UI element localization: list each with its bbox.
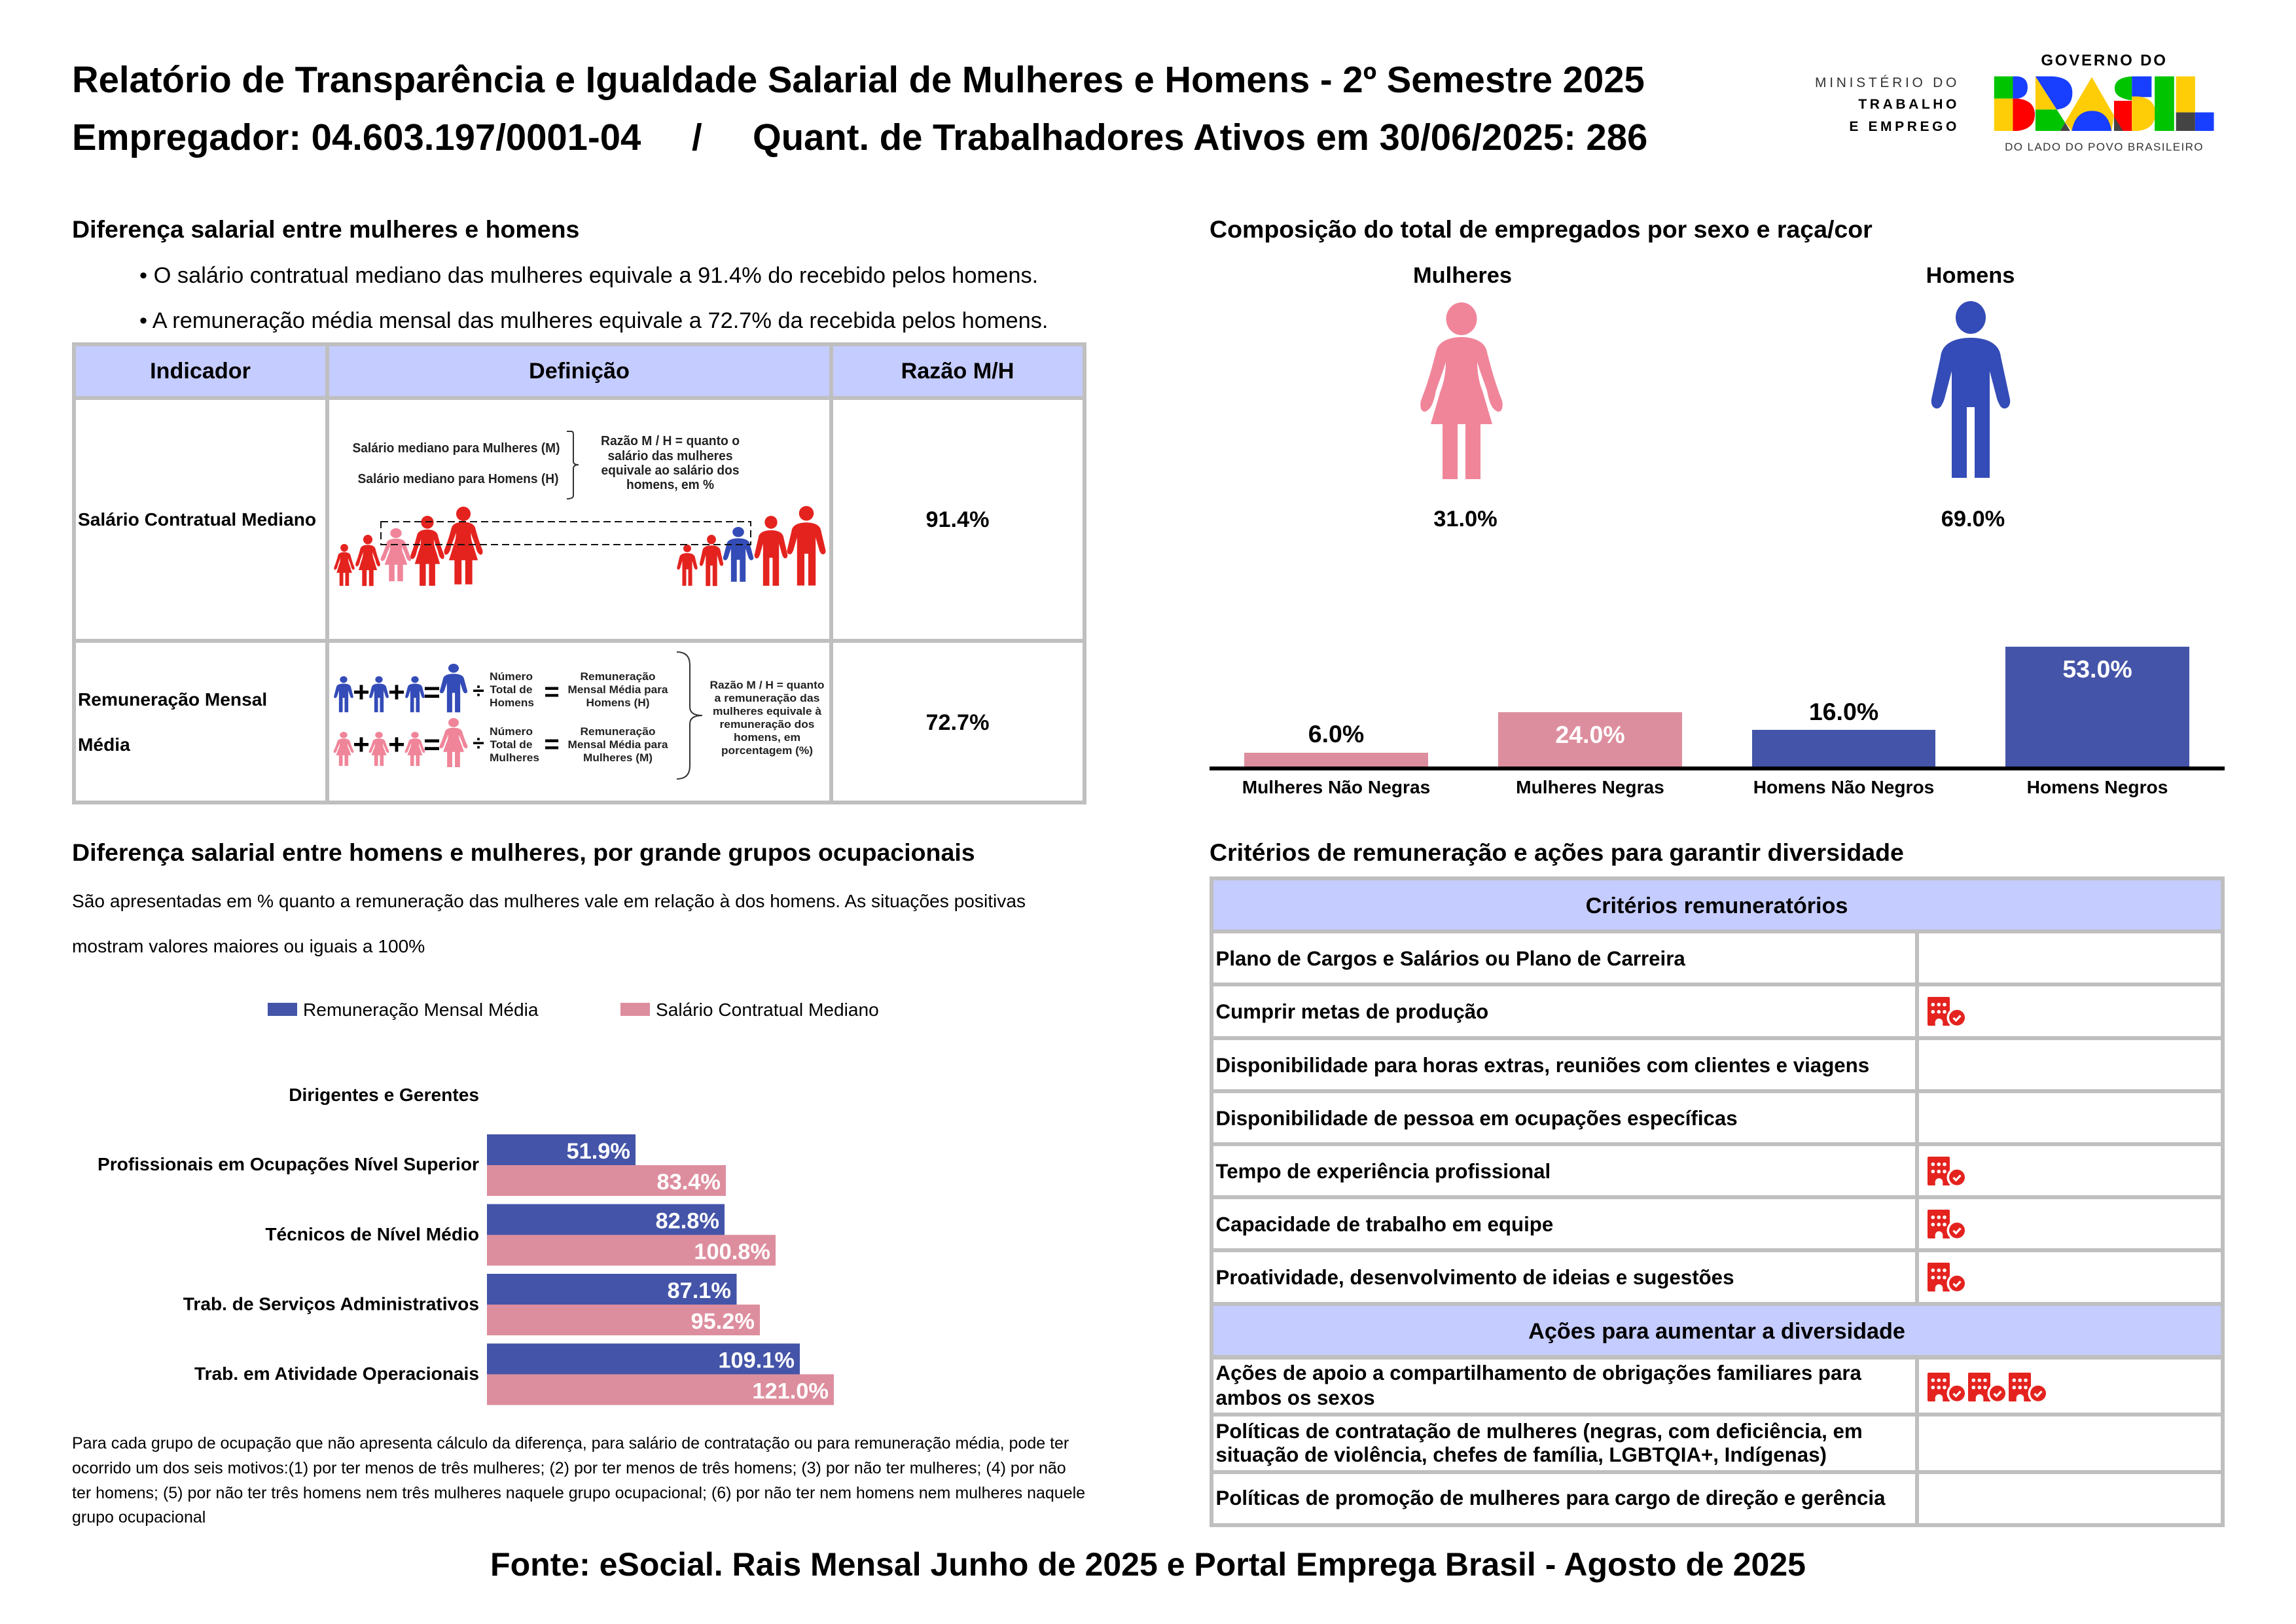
heading: grupos ocupacionais: Diferença salarial entre homens e mulheres, por grande grupos ocupacionais — [72, 839, 975, 866]
diagram: remuneração média: Total de — [490, 738, 533, 751]
icon: empresa tempo de experiência — [1928, 1157, 1967, 1187]
diagram: remuneração média: + — [353, 729, 370, 761]
diagram: remuneração média: Total de — [490, 683, 533, 696]
logo: ministério e governo do Brasil: DO LADO DO POVO BRASILEIRO — [2005, 141, 2204, 153]
table: critérios e ações: Capacidade de trabalho em equipe — [1216, 1213, 1553, 1236]
bar chart: grupos ocupacionais: 51.9% — [566, 1139, 630, 1164]
icon: woman figure — [1420, 302, 1503, 479]
diagram: remuneração média: = — [423, 676, 440, 708]
diagram: remuneração média: + — [388, 676, 405, 708]
diagram: salário mediano: Salário mediano para Mulheres (M) — [352, 441, 560, 456]
text block: bullets: • A remuneração média mensal das mulheres equivale a 72.7% da recebida pelos homens. — [139, 308, 1049, 333]
panel: diferença salarial — [72, 215, 1086, 804]
table: indicadores: Definição — [529, 359, 630, 384]
diagram: remuneração média — [334, 652, 825, 779]
bar chart: sexo e raça: 6.0% — [1308, 720, 1364, 748]
table: critérios e ações: situação de violência, chefes de família, LGBTQIA+, Indígenas) — [1216, 1443, 1827, 1466]
bar chart: grupos ocupacionais — [98, 1085, 834, 1405]
table: indicadores: Média — [78, 734, 130, 755]
diagram: remuneração média: Homens (H) — [586, 696, 649, 709]
bar chart: sexo e raça: Homens Negros — [2027, 777, 2168, 797]
bar chart: grupos ocupacionais: 82.8% — [655, 1208, 719, 1233]
bar chart: sexo e raça: Homens Não Negros — [1753, 777, 1934, 797]
diagram: remuneração média: = — [544, 730, 560, 759]
diagram: remuneração média: Número — [490, 670, 533, 683]
bar chart: grupos ocupacionais: Trab. de Serviços Administrativos — [183, 1293, 479, 1314]
text block: nota: ter homens; (5) por não ter três homens nem três mulheres naquele grupo ocupacional; (6) por não ter nem homens nem mulheres naquele — [72, 1484, 1085, 1502]
diagram: remuneração média: Remuneração — [580, 725, 656, 738]
diagram: remuneração média: a remuneração das — [715, 692, 819, 704]
diagram: remuneração média: ÷ — [473, 679, 484, 702]
table: indicadores: Remuneração Mensal — [78, 689, 267, 710]
diagram: salário mediano: equivale ao salário dos — [601, 463, 740, 478]
table: critérios e ações: Ações de apoio a compartilhamento de obrigações familiares para — [1216, 1362, 1862, 1384]
panel: composição — [1210, 215, 2225, 797]
bar chart: grupos ocupacionais: 87.1% — [667, 1278, 731, 1303]
text block: bullets — [139, 263, 1049, 333]
heading: composição: Composição do total de empregados por sexo e raça/cor — [1210, 215, 1873, 243]
table: critérios e ações: Tempo de experiência profissional — [1216, 1160, 1551, 1183]
text block: nota: grupo ocupacional — [72, 1508, 206, 1526]
panel: critérios — [1210, 839, 2225, 1527]
diagram: remuneração média: Mensal Média para — [568, 683, 668, 696]
diagram: remuneração média: Remuneração — [580, 670, 656, 683]
diagram: remuneração média: Mulheres — [490, 751, 539, 764]
bar chart: grupos ocupacionais: Profissionais em Ocupações Nível Superior — [98, 1154, 479, 1174]
icon: empresa proatividade — [1928, 1263, 1967, 1293]
text block: descrição — [72, 891, 1026, 956]
table: indicadores: 91.4% — [926, 507, 989, 532]
table: critérios e ações: Critérios remuneratórios — [1586, 893, 1848, 918]
table: indicadores: Salário Contratual Mediano — [78, 509, 316, 530]
logo: ministério e governo do Brasil — [1815, 52, 2214, 153]
table: indicadores: Razão M/H — [901, 359, 1014, 384]
diagram: remuneração média: Mulheres (M) — [583, 751, 653, 764]
text block: descrição: mostram valores maiores ou iguais a 100% — [72, 936, 425, 956]
bar chart: grupos ocupacionais: 95.2% — [691, 1309, 755, 1334]
legend: Salário Contratual Mediano — [656, 1000, 879, 1020]
table: critérios e ações: ambos os sexos — [1216, 1386, 1375, 1409]
diagram: remuneração média: porcentagem (%) — [721, 744, 813, 757]
panel: grupos ocupacionais — [72, 839, 1085, 1526]
bar chart: sexo e raça: Mulheres Não Negras — [1242, 777, 1430, 797]
legend — [268, 1000, 879, 1020]
title: Empregador: 04.603.197/0001-04 — [72, 117, 641, 158]
text block: nota — [72, 1434, 1085, 1526]
bar chart: sexo e raça: Mulheres Negras — [1516, 777, 1664, 797]
table: indicadores: Indicador — [150, 359, 251, 384]
bar chart: grupos ocupacionais: Trab. em Atividade Operacionais — [194, 1363, 479, 1384]
text block: descrição: São apresentadas em % quanto a remuneração das mulheres vale em relação à dos homens. As situações positivas — [72, 891, 1026, 911]
diagram: salário mediano: Salário mediano para Homens (H) — [357, 472, 559, 486]
table: critérios e ações: Disponibilidade de pessoa em ocupações específicas — [1216, 1107, 1738, 1130]
bar chart: sexo e raça: 53.0% — [2062, 655, 2132, 683]
diagram: remuneração média: remuneração dos — [720, 718, 814, 731]
diagram: salário mediano: homens, em % — [626, 478, 714, 492]
diagram: salário mediano — [334, 431, 826, 586]
table: critérios e ações: Ações para aumentar a diversidade — [1528, 1319, 1905, 1344]
bar chart: grupos ocupacionais: 109.1% — [718, 1348, 795, 1373]
bar chart: sexo e raça — [1210, 647, 2225, 797]
diagram: remuneração média: Razão M / H = quanto — [709, 679, 825, 691]
table: indicadores: 72.7% — [926, 710, 989, 735]
value: 31%: 31.0% — [1433, 507, 1498, 532]
footer: fonte: Fonte: eSocial. Rais Mensal Junho de 2025 e Portal Emprega Brasil - Agosto de 2025 — [490, 1546, 1806, 1583]
diagram: salário mediano: salário das mulheres — [607, 449, 733, 463]
table: critérios e ações: Proatividade, desenvolvimento de ideias e sugestões — [1216, 1266, 1734, 1289]
title: / — [692, 117, 702, 158]
label: homens: Homens — [1926, 263, 2015, 288]
title — [72, 59, 1647, 158]
diagram: remuneração média: Mensal Média para — [568, 738, 668, 751]
diagram: remuneração média: = — [423, 729, 440, 761]
bar chart: grupos ocupacionais: 121.0% — [752, 1379, 829, 1403]
title: Quant. de Trabalhadores Ativos em 30/06/2025: 286 — [753, 117, 1647, 158]
table: critérios e ações: Plano de Cargos e Salários ou Plano de Carreira — [1216, 947, 1685, 970]
value: 69%: 69.0% — [1941, 507, 2005, 532]
legend: Remuneração Mensal Média — [303, 1000, 539, 1020]
diagram: remuneração média: + — [388, 729, 405, 761]
bar chart: sexo e raça: 16.0% — [1809, 698, 1878, 725]
table: critérios e ações: Disponibilidade para horas extras, reuniões com clientes e viagens — [1216, 1054, 1869, 1077]
icon: man figure — [1931, 301, 2010, 478]
heading: critérios: Critérios de remuneração e ações para garantir diversidade — [1210, 839, 1904, 866]
table: indicadores — [72, 342, 1086, 804]
heading: diferença salarial: Diferença salarial entre mulheres e homens — [72, 215, 579, 243]
bar chart: grupos ocupacionais: 100.8% — [694, 1240, 770, 1265]
bar chart: grupos ocupacionais: 83.4% — [656, 1170, 721, 1195]
logo: ministério e governo do Brasil: MINISTÉRIO DO — [1815, 75, 1960, 90]
table: critérios e ações: Políticas de contratação de mulheres (negras, com deficiência, em — [1216, 1420, 1863, 1443]
logo: ministério e governo do Brasil: GOVERNO DO — [2041, 52, 2168, 69]
text block: bullets: • O salário contratual mediano das mulheres equivale a 91.4% do recebido pelos homens. — [139, 263, 1038, 288]
diagram: remuneração média: Número — [490, 725, 533, 738]
diagram: remuneração média: ÷ — [473, 731, 484, 755]
diagram: remuneração média: = — [544, 677, 560, 706]
table: critérios e ações — [1210, 876, 2225, 1527]
diagram: salário mediano: Razão M / H = quanto o — [601, 434, 740, 448]
icon: empresa capacidade de trabalho — [1928, 1210, 1967, 1240]
table: critérios e ações: Cumprir metas de produção — [1216, 1000, 1488, 1023]
bar chart: sexo e raça: 24.0% — [1555, 721, 1625, 748]
table: critérios e ações: Políticas de promoção de mulheres para cargo de direção e gerência — [1216, 1487, 1886, 1509]
bar chart: grupos ocupacionais: Técnicos de Nível Médio — [265, 1224, 479, 1244]
icon: empresa cumpre metas de produção — [1928, 997, 1967, 1028]
diagram: remuneração média: Homens — [490, 696, 534, 709]
bar chart: grupos ocupacionais: Dirigentes e Gerentes — [289, 1085, 479, 1105]
diagram: remuneração média: homens, em — [734, 731, 800, 744]
title: Relatório de Transparência e Igualdade Salarial de Mulheres e Homens - 2º Semestre 2025 — [72, 59, 1645, 100]
text block: nota: Para cada grupo de ocupação que não apresenta cálculo da diferença, para salário de contratação ou para remuneração média, pode ter — [72, 1434, 1069, 1453]
text block: nota: ocorrido um dos seis motivos:(1) por ter menos de três mulheres; (2) por ter menos de três homens; (3) por não ter mulheres; (4) por não — [72, 1459, 1066, 1477]
diagram: remuneração média: mulheres equivale à — [713, 705, 822, 717]
label: mulheres: Mulheres — [1413, 263, 1512, 288]
icons: três empresas ações de apoio — [1928, 1373, 2049, 1403]
logo: ministério e governo do Brasil: TRABALHO — [1858, 97, 1960, 112]
diagram: remuneração média: + — [353, 676, 370, 708]
logo: ministério e governo do Brasil: E EMPREGO — [1849, 119, 1960, 134]
